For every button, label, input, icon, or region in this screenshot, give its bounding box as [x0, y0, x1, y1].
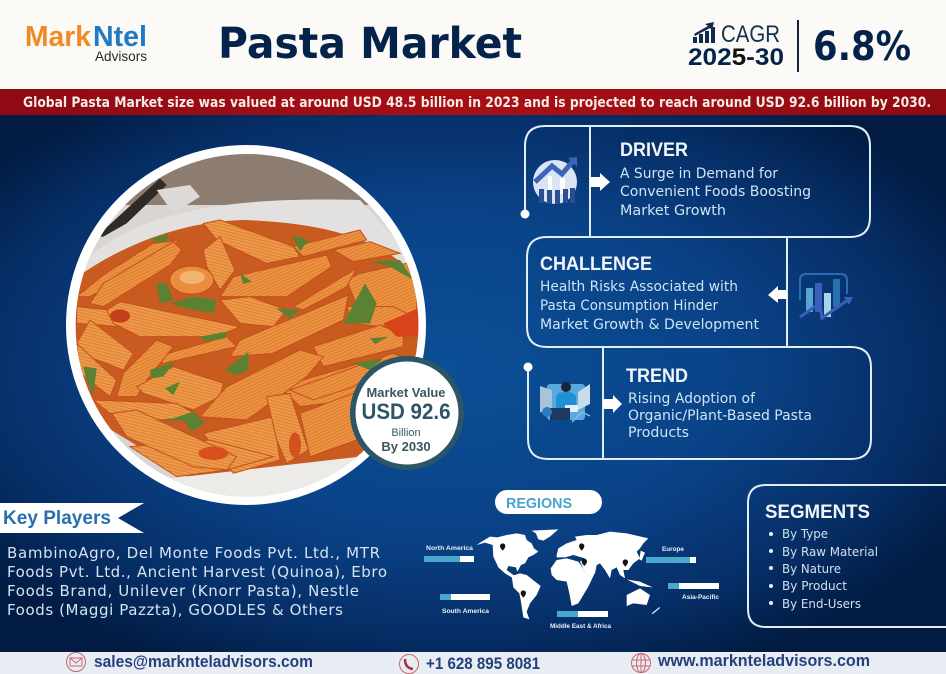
region: europe	[646, 546, 696, 563]
driver text: Convenient Foods Boosting	[620, 184, 811, 200]
challenge text	[540, 279, 760, 333]
segments heading: SEGMENTS	[765, 502, 870, 523]
trend text: Products	[628, 425, 689, 441]
region: asia-pacific	[668, 583, 719, 601]
CAGR value: 6.8%	[813, 24, 911, 70]
penne	[77, 220, 417, 477]
logo: Mark	[25, 21, 92, 53]
arrow: challenge	[768, 286, 787, 303]
logo: Advisors	[95, 48, 147, 64]
panel: challenge	[527, 237, 853, 347]
footer	[0, 651, 946, 674]
segments list: By Type	[782, 526, 828, 541]
region: europe: Europe	[662, 546, 684, 553]
key players list: Foods (Maggi Pazzta), GOODLES & Others	[7, 601, 343, 619]
key players list: Foods Pvt. Ltd., Ancient Harvest (Quinoa), Ebro	[7, 563, 387, 581]
key players list: Foods Brand, Unilever (Knorr Pasta), Nestle	[7, 582, 359, 600]
trend text	[628, 391, 812, 441]
region: middle east and africa: Middle East & Africa	[550, 623, 611, 630]
badge value: USD 92.6	[362, 399, 450, 424]
header band	[0, 0, 946, 89]
basil	[83, 234, 413, 432]
CAGR label: CAGR	[721, 21, 780, 48]
key players list	[7, 544, 387, 619]
driver text: A Surge in Demand for	[620, 166, 778, 182]
pins	[500, 543, 628, 598]
logo: Ntel	[93, 21, 147, 53]
icon: phone	[400, 654, 418, 674]
icon: growth bars	[693, 22, 715, 43]
challenge heading: CHALLENGE	[540, 254, 652, 275]
phone: +1 628 895 8081	[426, 654, 540, 673]
regions pill: REGIONS	[506, 495, 572, 512]
regions pill	[495, 490, 602, 514]
icon: trend analyst	[540, 382, 590, 422]
arrow: driver	[590, 173, 610, 191]
panel: driver	[520, 126, 870, 237]
badge unit: Billion	[391, 427, 421, 439]
badge label: Market Value	[366, 385, 446, 400]
segments list: By Nature	[782, 561, 841, 576]
region: middle east and africa	[550, 611, 611, 630]
key players list: BambinoAgro, Del Monte Foods Pvt. Ltd., MTR	[7, 544, 380, 562]
region: north america	[424, 545, 474, 562]
icon: driver growth	[533, 157, 577, 204]
CAGR block	[688, 20, 911, 72]
website: www.marknteladvisors.com	[657, 651, 870, 670]
trend text: Rising Adoption of	[628, 391, 756, 407]
panel: segments	[748, 485, 946, 627]
title: Pasta Market	[218, 19, 522, 69]
segments list: By Raw Material	[782, 544, 878, 559]
challenge text: Health Risks Associated with	[540, 279, 738, 295]
email: sales@marknteladvisors.com	[94, 652, 313, 671]
pasta photo	[60, 140, 437, 513]
tomato	[383, 308, 420, 337]
CAGR period: 2025-30	[688, 44, 784, 71]
icon: globe	[632, 653, 650, 673]
icon: challenge chart	[800, 274, 853, 318]
challenge text: Pasta Consumption Hinder	[540, 298, 718, 314]
world map	[477, 529, 660, 619]
arrow: trend	[603, 395, 622, 413]
segments list: By End-Users	[782, 596, 861, 611]
banner: summary	[0, 89, 946, 115]
driver text: Market Growth	[620, 203, 726, 219]
region: north america: North America	[426, 545, 473, 552]
driver text	[620, 166, 811, 219]
region: south america: South America	[442, 608, 489, 615]
region: asia-pacific: Asia-Pacific	[682, 594, 719, 601]
segments list: By Product	[782, 578, 847, 593]
segments list	[769, 526, 878, 611]
ring pasta	[170, 266, 214, 294]
market value badge	[350, 356, 464, 470]
region: south america	[440, 594, 490, 615]
panel: trend	[524, 347, 871, 459]
driver heading: DRIVER	[620, 140, 688, 161]
logo	[25, 21, 147, 64]
trend text: Organic/Plant-Based Pasta	[628, 408, 812, 424]
key players ribbon: Key Players	[3, 508, 111, 529]
divider	[797, 20, 799, 72]
badge year: By 2030	[381, 439, 431, 454]
trend heading: TREND	[626, 366, 688, 387]
icon: mail	[66, 652, 86, 672]
key players ribbon	[0, 503, 144, 533]
challenge text: Market Growth & Development	[540, 317, 760, 333]
